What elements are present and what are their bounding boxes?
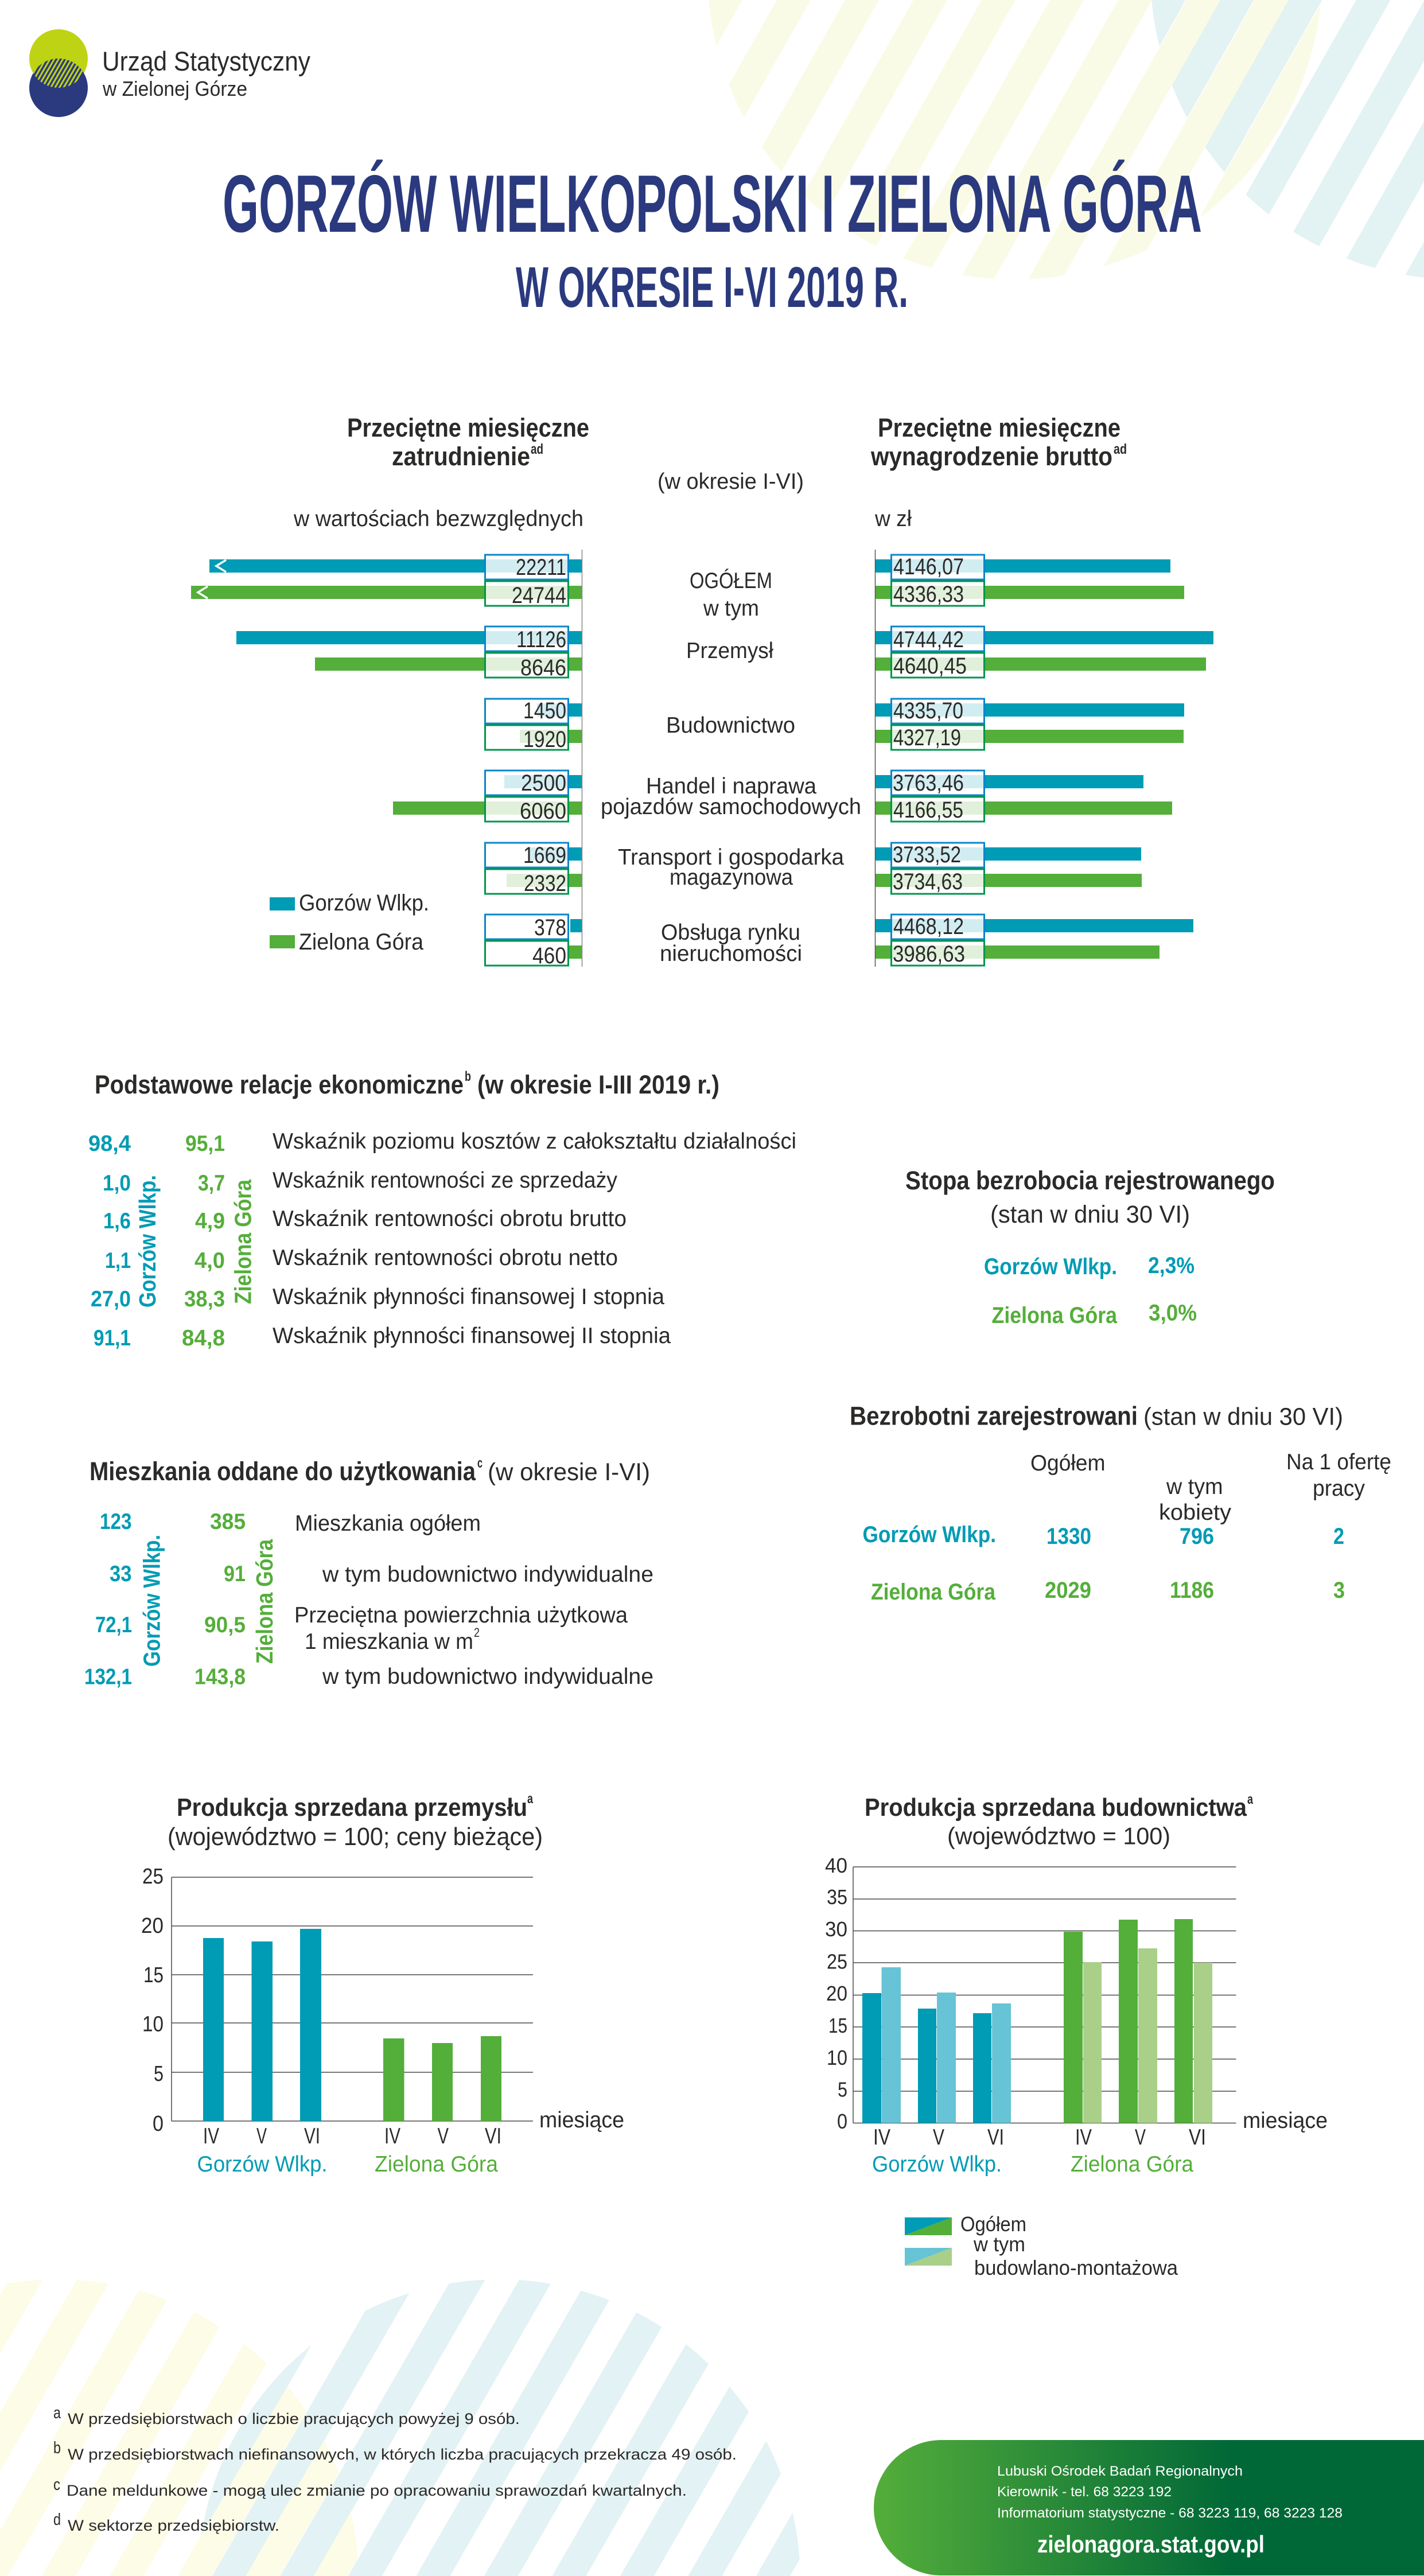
heading: Bezrobotni zarejestrowani <box>850 1401 1138 1431</box>
unit label: wages: w zł <box>874 507 912 531</box>
category labels: pojazdów samochodowych <box>601 795 861 819</box>
values: Gorzów Wlkp.: 1,1 <box>105 1248 131 1273</box>
panel: dwellings <box>84 1456 653 1689</box>
gridlines and axis <box>853 1867 1236 2123</box>
logo text: Urząd Statystyczny <box>102 46 310 76</box>
bar chart: employment: 22211 <box>516 555 566 580</box>
y axis labels: 0 <box>153 2112 164 2136</box>
heading: (w okresie I-VI) <box>488 1458 650 1486</box>
x axis labels: V <box>256 2124 267 2149</box>
bar chart: wages: 4744,42 <box>893 627 964 652</box>
values: Zielona Góra: 4,0 <box>194 1248 225 1273</box>
values: Gorzów Wlkp.: Gorzów Wlkp. <box>134 1175 161 1308</box>
y axis labels: 5 <box>838 2078 847 2101</box>
dwelling labels: Mieszkania ogółem <box>295 1511 481 1536</box>
heading: Stopa bezrobocia rejestrowanego <box>905 1166 1275 1195</box>
dwelling labels: 1 mieszkania w m <box>305 1629 473 1654</box>
panel: industrial production chart <box>141 1791 624 2177</box>
rate: Zielona Góra <box>991 1300 1197 1328</box>
logo text <box>102 46 310 100</box>
row: Gorzów Wlkp.: 2 <box>1333 1524 1344 1549</box>
bar chart: wages: 3763,46 <box>893 771 964 796</box>
values: Zielona Góra: Zielona Góra <box>229 1179 256 1304</box>
dwelling labels: Przeciętna powierzchnia użytkowa <box>294 1603 628 1628</box>
bar chart: employment: 24744 <box>512 583 566 608</box>
y axis labels: 15 <box>828 2014 847 2037</box>
category labels: Handel i naprawa <box>646 774 816 799</box>
legend: cities: Gorzów Wlkp. <box>299 890 429 916</box>
x axis labels: IV <box>203 2124 219 2149</box>
category labels: magazynowa <box>670 865 793 890</box>
values: Gorzów Wlkp.: 72,1 <box>95 1613 132 1637</box>
panel: registered unemployed <box>850 1401 1391 1605</box>
unit label: employment: w wartościach bezwzględnych <box>293 507 583 531</box>
values: Gorzów Wlkp.: Gorzów Wlkp. <box>139 1535 165 1667</box>
x axis labels: Zielona Góra <box>375 2152 498 2177</box>
values: Zielona Góra: 3,7 <box>198 1171 225 1196</box>
rate: Gorzów Wlkp.: 2,3% <box>1148 1253 1195 1278</box>
bar chart: employment: 1669 <box>523 843 566 868</box>
heading: c <box>477 1456 483 1471</box>
y axis labels: 25 <box>142 1865 164 1889</box>
bar chart: wages: 4336,33 <box>893 582 964 607</box>
values: Gorzów Wlkp. <box>88 1131 161 1351</box>
logo <box>29 29 310 117</box>
heading: (w okresie I-III 2019 r.) <box>477 1070 719 1099</box>
heading: (stan w dniu 30 VI) <box>990 1201 1190 1228</box>
bar chart: employment: 460 <box>532 943 566 968</box>
heading: a <box>1247 1792 1253 1807</box>
bar chart: employment <box>191 550 582 968</box>
row: Zielona Góra <box>871 1578 1345 1605</box>
bar chart: employment: 1920 <box>523 727 566 752</box>
footnotes: Dane meldunkowe - mogą ulec zmianie po opracowaniu sprawozdań kwartalnych. <box>67 2482 687 2499</box>
x axis labels: V <box>933 2125 944 2150</box>
legend: cities: Zielona Góra <box>299 929 424 955</box>
y axis labels: 40 <box>825 1854 847 1877</box>
bar chart: employment: 2332 <box>524 871 566 896</box>
heading <box>95 1069 719 1099</box>
row: Gorzów Wlkp. <box>863 1522 1344 1549</box>
y axis labels: 5 <box>154 2062 164 2086</box>
row: Gorzów Wlkp.: Gorzów Wlkp. <box>863 1522 996 1547</box>
footnotes: W przedsiębiorstwach o liczbie pracujących powyżej 9 osób. <box>68 2410 520 2427</box>
x axis labels: VI <box>1189 2125 1206 2150</box>
column headers: w tym <box>1166 1474 1223 1499</box>
footnotes: a <box>53 2404 61 2422</box>
legend <box>905 2212 1178 2279</box>
indicator labels: Wskaźnik poziomu kosztów z całokształtu działalności <box>273 1129 796 1154</box>
x axis labels <box>197 2108 624 2177</box>
legend: w tym <box>973 2232 1025 2256</box>
bar chart: wages <box>876 550 1213 967</box>
y axis labels: 10 <box>142 2013 164 2037</box>
y axis labels: 25 <box>827 1949 847 1974</box>
y axis labels: 15 <box>143 1963 164 1987</box>
bar chart: employment: 8646 <box>520 655 566 680</box>
panel: construction production chart <box>825 1792 1328 2279</box>
x axis labels: miesiące <box>539 2108 624 2133</box>
footnotes: c <box>53 2476 60 2494</box>
indicator labels: Wskaźnik rentowności obrotu netto <box>273 1246 618 1270</box>
heading <box>865 1792 1253 1850</box>
x axis labels <box>872 2108 1328 2177</box>
x axis labels: VI <box>304 2124 320 2149</box>
category labels: OGÓŁEM <box>690 569 772 593</box>
x axis labels: V <box>1135 2125 1146 2150</box>
heading: wages: wynagrodzenie brutto <box>870 442 1112 471</box>
bar chart: wages: 4335,70 <box>893 698 963 723</box>
y axis labels: 35 <box>827 1885 847 1909</box>
row: Zielona Góra: 2029 <box>1045 1578 1091 1603</box>
bar chart: wages: 3734,63 <box>893 869 963 894</box>
heading: Produkcja sprzedana budownictwa <box>865 1793 1247 1822</box>
subtitle: W OKRESIE I-VI 2019 R. <box>516 255 908 320</box>
rate: Zielona Góra: 3,0% <box>1149 1300 1197 1325</box>
bar chart: employment: 11126 <box>516 627 566 652</box>
footnotes: W sektorze przedsiębiorstw. <box>68 2517 279 2534</box>
heading <box>850 1401 1343 1431</box>
heading: Podstawowe relacje ekonomiczne <box>95 1070 464 1099</box>
values: Gorzów Wlkp.: 1,0 <box>103 1171 131 1196</box>
column headers <box>1030 1450 1391 1525</box>
heading: (stan w dniu 30 VI) <box>1143 1403 1343 1431</box>
values: Zielona Góra: 143,8 <box>194 1665 246 1689</box>
bar chart: wages: 3733,52 <box>893 842 961 867</box>
x axis labels: VI <box>485 2124 501 2149</box>
column headers: Ogółem <box>1030 1451 1105 1476</box>
values: Zielona Góra <box>182 1131 256 1351</box>
y axis labels: 30 <box>825 1917 847 1941</box>
website: zielonagora.stat.gov.pl <box>1037 2531 1265 2558</box>
contact text: Kierownik - tel. 68 3223 192 <box>997 2484 1172 2500</box>
icon: overlapping circles <box>29 29 88 117</box>
x axis labels: Zielona Góra <box>1071 2152 1193 2177</box>
row: Zielona Góra: 3 <box>1333 1578 1345 1603</box>
values: Gorzów Wlkp.: 1,6 <box>103 1209 131 1233</box>
dwelling labels: w tym budownictwo indywidualne <box>322 1562 653 1587</box>
bar chart: wages: 3986,63 <box>893 941 965 967</box>
bar chart: employment: 1450 <box>523 698 566 723</box>
x axis labels: IV <box>873 2125 890 2150</box>
heading <box>168 1791 543 1851</box>
bar chart: wages: 4468,12 <box>893 914 964 939</box>
heading: employment <box>347 413 589 471</box>
values: Zielona Góra <box>194 1509 278 1689</box>
category labels <box>601 569 861 966</box>
heading <box>905 1166 1275 1228</box>
indicator labels: Wskaźnik płynności finansowej II stopnia <box>273 1324 671 1348</box>
heading: wages: ad <box>1114 441 1127 457</box>
row: Gorzów Wlkp.: 796 <box>1180 1524 1214 1549</box>
heading: (województwo = 100; ceny bieżące) <box>168 1823 543 1851</box>
values: Zielona Góra: 84,8 <box>182 1326 225 1351</box>
footnotes: b <box>53 2439 61 2457</box>
indicator labels <box>273 1129 796 1348</box>
y axis labels <box>825 1854 847 2133</box>
footnotes: d <box>53 2511 61 2529</box>
values: Gorzów Wlkp.: 33 <box>110 1562 132 1586</box>
gridlines and axis <box>172 1877 533 2121</box>
values: Zielona Góra: Zielona Góra <box>251 1539 278 1664</box>
contact text: Lubuski Ośrodek Badań Regionalnych <box>997 2464 1243 2479</box>
values: Zielona Góra: 95,1 <box>185 1131 225 1156</box>
dwelling labels: w tym budownictwo indywidualne <box>322 1664 653 1689</box>
panel: economic relations <box>88 1069 796 1351</box>
heading: employment: ad <box>531 441 543 457</box>
y axis labels: 0 <box>837 2110 847 2133</box>
bars <box>203 1929 501 2121</box>
footnotes <box>53 2404 737 2534</box>
period label: (w okresie I-VI) <box>657 469 804 494</box>
row: Zielona Góra: Zielona Góra <box>871 1579 996 1605</box>
bar chart: wages: 4146,07 <box>893 554 964 579</box>
heading: b <box>465 1069 471 1084</box>
heading: Produkcja sprzedana przemysłu <box>177 1793 527 1822</box>
indicator labels: Wskaźnik płynności finansowej I stopnia <box>273 1285 664 1309</box>
x axis labels: Gorzów Wlkp. <box>872 2152 1002 2177</box>
values: Zielona Góra: 91 <box>224 1562 246 1586</box>
heading: wages: Przeciętne miesięczne <box>878 413 1120 442</box>
heading: a <box>527 1791 533 1807</box>
bars <box>862 1919 1212 2123</box>
values: Gorzów Wlkp.: 123 <box>100 1509 132 1534</box>
values: Zielona Góra: 385 <box>210 1509 246 1534</box>
rate: Gorzów Wlkp. <box>984 1253 1195 1279</box>
footnotes: W przedsiębiorstwach niefinansowych, w których liczba pracujących przekracza 49 osób. <box>68 2446 737 2463</box>
x axis labels: VI <box>987 2125 1004 2150</box>
bar chart: employment: 6060 <box>520 799 566 824</box>
dwelling labels: 2 <box>474 1625 480 1640</box>
dwelling labels <box>294 1511 653 1689</box>
background stripes: bottom left <box>0 2279 800 2576</box>
x axis labels: IV <box>384 2124 400 2149</box>
category labels: nieruchomości <box>660 941 802 966</box>
heading: employment: Przeciętne miesięczne <box>347 413 589 442</box>
indicator labels: Wskaźnik rentowności obrotu brutto <box>273 1207 627 1231</box>
column headers: kobiety <box>1159 1500 1232 1525</box>
contact text: Informatorium statystyczne - 68 3223 119, 68 3223 128 <box>997 2505 1343 2521</box>
category labels: Budownictwo <box>666 713 795 738</box>
bar chart: employment: 378 <box>534 915 566 940</box>
category labels: Przemysł <box>686 639 773 663</box>
values: Gorzów Wlkp. <box>84 1509 165 1689</box>
category labels: Obsługa rynku <box>661 920 800 945</box>
heading: (województwo = 100) <box>947 1822 1170 1850</box>
panel: unemployment rate <box>905 1166 1275 1328</box>
contact panel <box>874 2440 1424 2575</box>
category labels: Transport i gospodarka <box>618 845 844 870</box>
bar chart: wages: 4166,55 <box>893 797 963 823</box>
values: Gorzów Wlkp.: 27,0 <box>91 1287 131 1312</box>
x axis labels: IV <box>1075 2125 1092 2150</box>
bar chart: wages: 4640,45 <box>893 653 967 679</box>
values: Gorzów Wlkp.: 98,4 <box>88 1131 131 1156</box>
values: Zielona Góra: 38,3 <box>184 1287 225 1312</box>
row: Zielona Góra: 1186 <box>1170 1578 1214 1603</box>
bar chart: employment: 2500 <box>521 771 566 796</box>
x axis labels: miesiące <box>1243 2108 1328 2133</box>
values: Zielona Góra: 4,9 <box>195 1209 225 1233</box>
category labels: w tym <box>703 596 759 621</box>
y axis labels: 20 <box>826 1982 847 2005</box>
values: Gorzów Wlkp.: 132,1 <box>84 1665 132 1689</box>
indicator labels: Wskaźnik rentowności ze sprzedaży <box>273 1168 617 1193</box>
rate: Zielona Góra: Zielona Góra <box>991 1303 1118 1328</box>
logo text: w Zielonej Górze <box>102 77 247 100</box>
y axis labels <box>141 1865 164 2136</box>
row: Gorzów Wlkp.: 1330 <box>1046 1524 1091 1549</box>
heading: employment: zatrudnienie <box>392 442 530 471</box>
x axis labels: V <box>437 2124 449 2149</box>
legend: budowlano-montażowa <box>974 2256 1178 2279</box>
column headers: Na 1 ofertę <box>1286 1450 1391 1474</box>
heading: wages <box>870 413 1127 471</box>
values: Zielona Góra: 90,5 <box>204 1613 246 1637</box>
values: Gorzów Wlkp.: 91,1 <box>94 1326 131 1351</box>
column headers: pracy <box>1313 1476 1365 1501</box>
legend: cities <box>270 890 429 955</box>
y axis labels: 20 <box>141 1914 164 1938</box>
legend: Ogółem <box>960 2212 1026 2236</box>
contact text <box>997 2464 1343 2521</box>
y axis labels: 10 <box>827 2046 847 2069</box>
rate: Gorzów Wlkp.: Gorzów Wlkp. <box>984 1254 1117 1279</box>
background stripes: top right <box>709 0 1424 279</box>
heading: Mieszkania oddane do użytkowania <box>90 1457 476 1486</box>
x axis labels: Gorzów Wlkp. <box>197 2152 327 2177</box>
bar chart: wages: 4327,19 <box>893 725 961 750</box>
